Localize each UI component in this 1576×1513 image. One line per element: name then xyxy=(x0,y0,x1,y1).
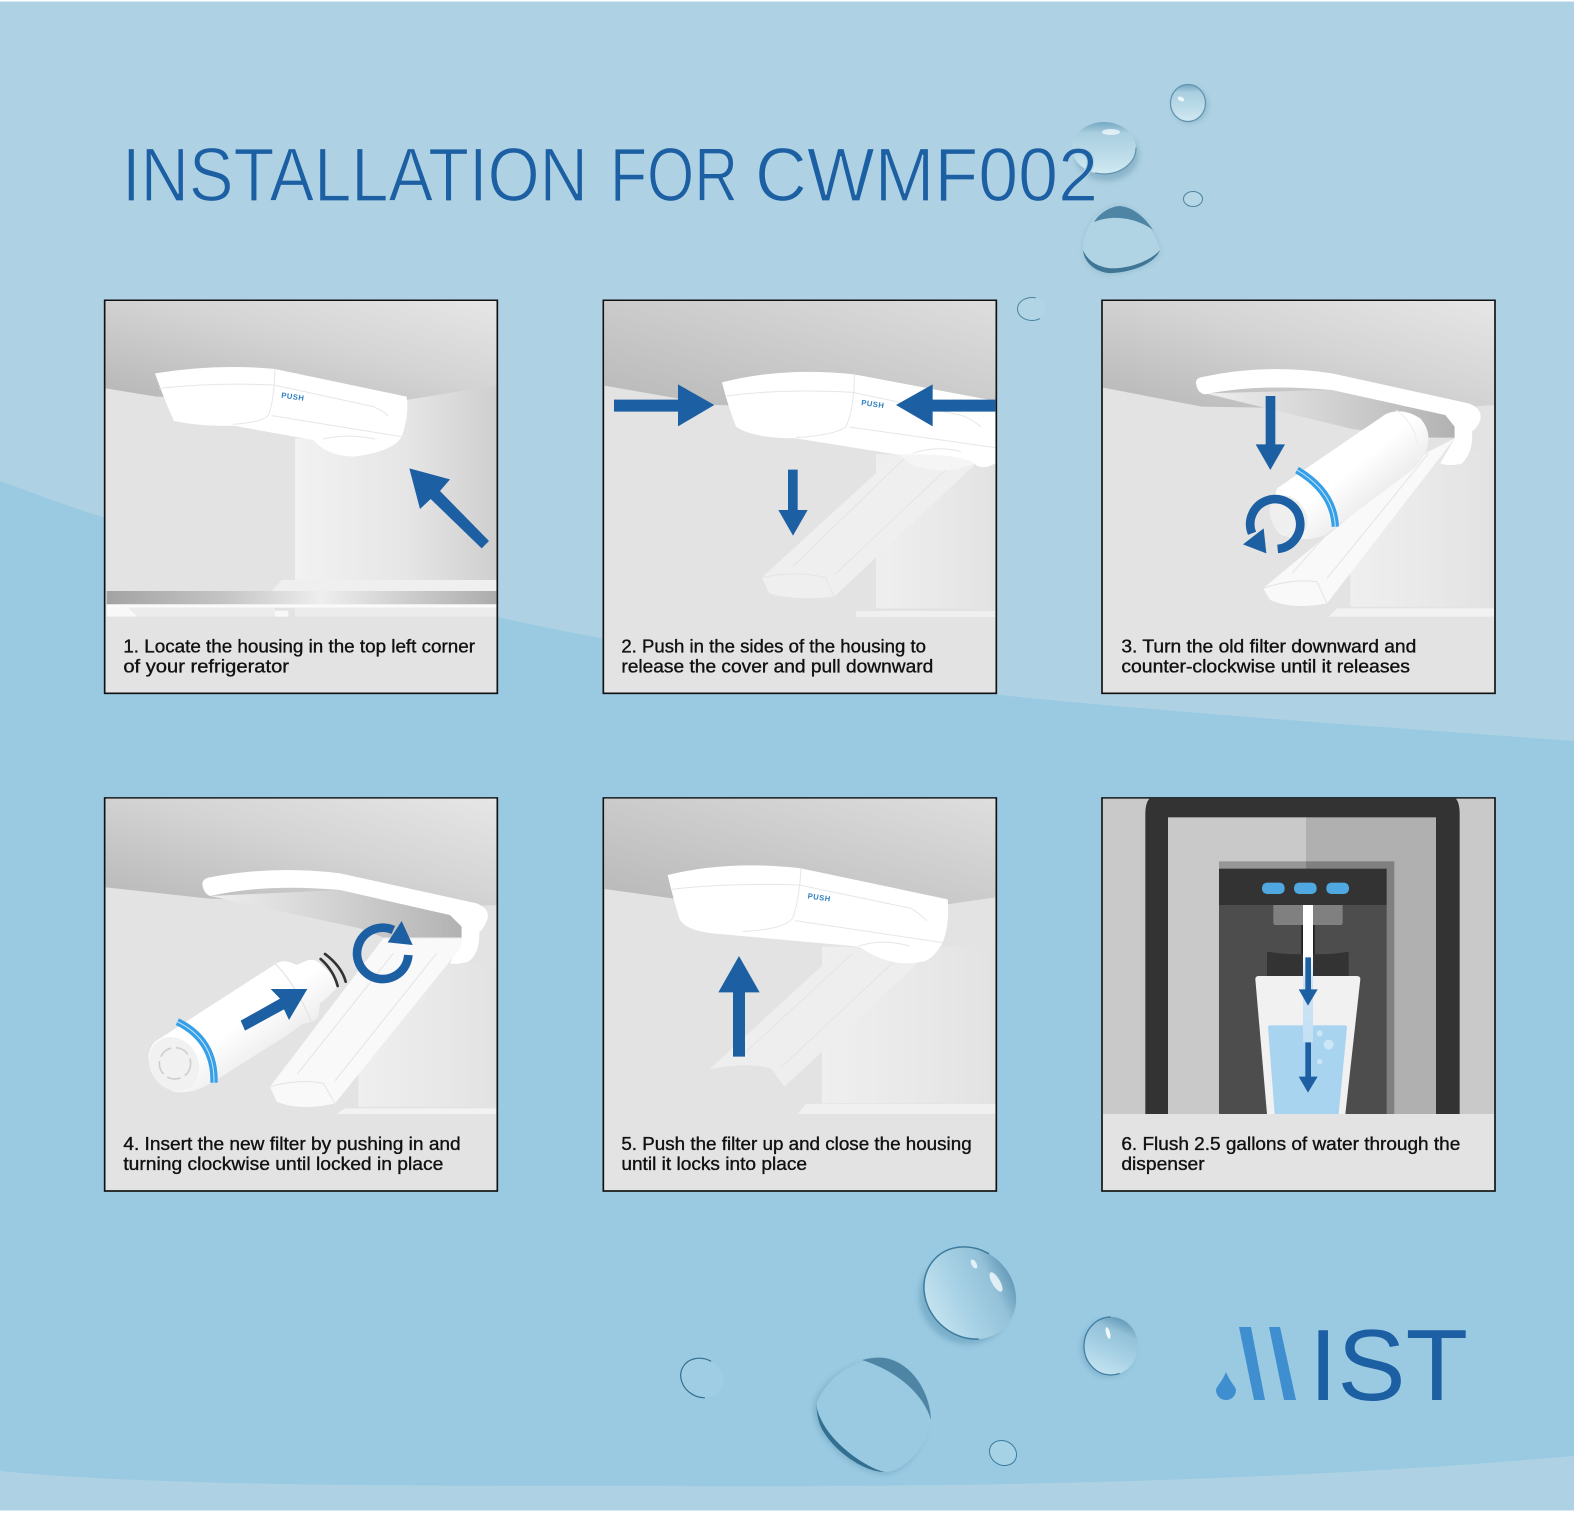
ceiling xyxy=(1103,301,1494,410)
shelf xyxy=(856,611,995,617)
caption xyxy=(1103,1114,1494,1190)
panel: step 1 xyxy=(105,300,497,693)
title xyxy=(122,133,1098,218)
caption: 3. Turn the old filter downward and xyxy=(1121,636,1416,657)
caption: of your refrigerator xyxy=(123,656,289,677)
housing shell xyxy=(202,870,488,964)
column xyxy=(1350,452,1494,607)
arrow: pull down xyxy=(778,470,808,536)
filter xyxy=(139,960,338,1100)
dispenser frame xyxy=(1145,799,1460,1114)
caption: until it locks into place xyxy=(621,1153,807,1174)
arrow: up xyxy=(718,956,760,1057)
column and right wall xyxy=(295,386,496,582)
logo bars xyxy=(1239,1327,1296,1400)
caption: 6. Flush 2.5 gallons of water through the xyxy=(1121,1133,1460,1154)
caption xyxy=(123,1133,461,1174)
caption: counter-clockwise until it releases xyxy=(1121,656,1410,677)
title: FOR xyxy=(610,133,738,218)
panel: step 2 xyxy=(603,300,996,693)
caption xyxy=(123,636,475,677)
glass xyxy=(1255,976,1360,1114)
title: CWMF002 xyxy=(755,133,1098,218)
recess xyxy=(1219,861,1394,1114)
housing shell xyxy=(1196,369,1481,465)
housing: PUSH xyxy=(861,398,885,410)
caption: 2. Push in the sides of the housing to xyxy=(621,636,926,657)
panel: step 6 xyxy=(1102,798,1495,1191)
arrow: down xyxy=(1256,396,1285,470)
housing xyxy=(155,367,407,457)
panel: step 4 xyxy=(105,798,497,1191)
arrow: water top xyxy=(1299,957,1318,1006)
filter xyxy=(1262,410,1428,545)
arrow: push left xyxy=(896,384,995,426)
door background xyxy=(1103,799,1494,1114)
water droplets top xyxy=(1018,84,1208,320)
caption: turning clockwise until locked in place xyxy=(123,1153,443,1174)
arrow: push in xyxy=(241,989,307,1031)
housing: PUSH xyxy=(807,891,831,904)
title: INSTALLATION xyxy=(122,133,588,218)
column xyxy=(876,454,995,608)
open cover xyxy=(1263,438,1455,606)
pulled down cover xyxy=(762,449,976,598)
arrow: water bottom xyxy=(1299,1042,1318,1093)
rotation arrow xyxy=(1243,499,1300,553)
shelf xyxy=(337,1108,496,1114)
shelf xyxy=(1329,608,1494,617)
logo text: IST xyxy=(1309,1310,1468,1422)
panel: step 5 xyxy=(603,798,996,1191)
housing: PUSH xyxy=(281,391,305,403)
ceiling xyxy=(106,301,496,400)
open cover xyxy=(270,938,462,1107)
inner door xyxy=(1168,817,1436,1114)
column xyxy=(358,963,496,1107)
rotation arrow xyxy=(357,921,413,979)
caption xyxy=(621,636,933,677)
logo: MIST xyxy=(1216,1310,1468,1422)
caption: release the cover and pull downward xyxy=(621,656,933,677)
cover xyxy=(709,947,921,1087)
water stream xyxy=(1303,905,1313,1042)
ceiling xyxy=(106,799,496,908)
shelf xyxy=(107,580,496,617)
nozzle xyxy=(1267,905,1349,978)
ceiling xyxy=(604,799,995,904)
control panel xyxy=(1219,869,1387,905)
housing xyxy=(668,865,948,963)
caption: 1. Locate the housing in the top left corner xyxy=(123,636,475,657)
caption: 4. Insert the new filter by pushing in and xyxy=(123,1133,461,1154)
caption: dispenser xyxy=(1121,1153,1205,1174)
water droplets bottom xyxy=(673,1228,1138,1474)
caption xyxy=(621,1133,972,1174)
housing xyxy=(722,372,995,467)
shelf xyxy=(798,1104,995,1114)
caption xyxy=(1121,636,1416,677)
arrow: push right xyxy=(614,384,714,426)
logo drop xyxy=(1216,1372,1236,1400)
ceiling xyxy=(604,301,995,408)
panel: step 3 xyxy=(1102,300,1495,693)
column xyxy=(822,947,995,1103)
arrow xyxy=(409,468,489,548)
caption: 5. Push the filter up and close the housing xyxy=(621,1133,972,1154)
o-rings xyxy=(321,954,346,986)
